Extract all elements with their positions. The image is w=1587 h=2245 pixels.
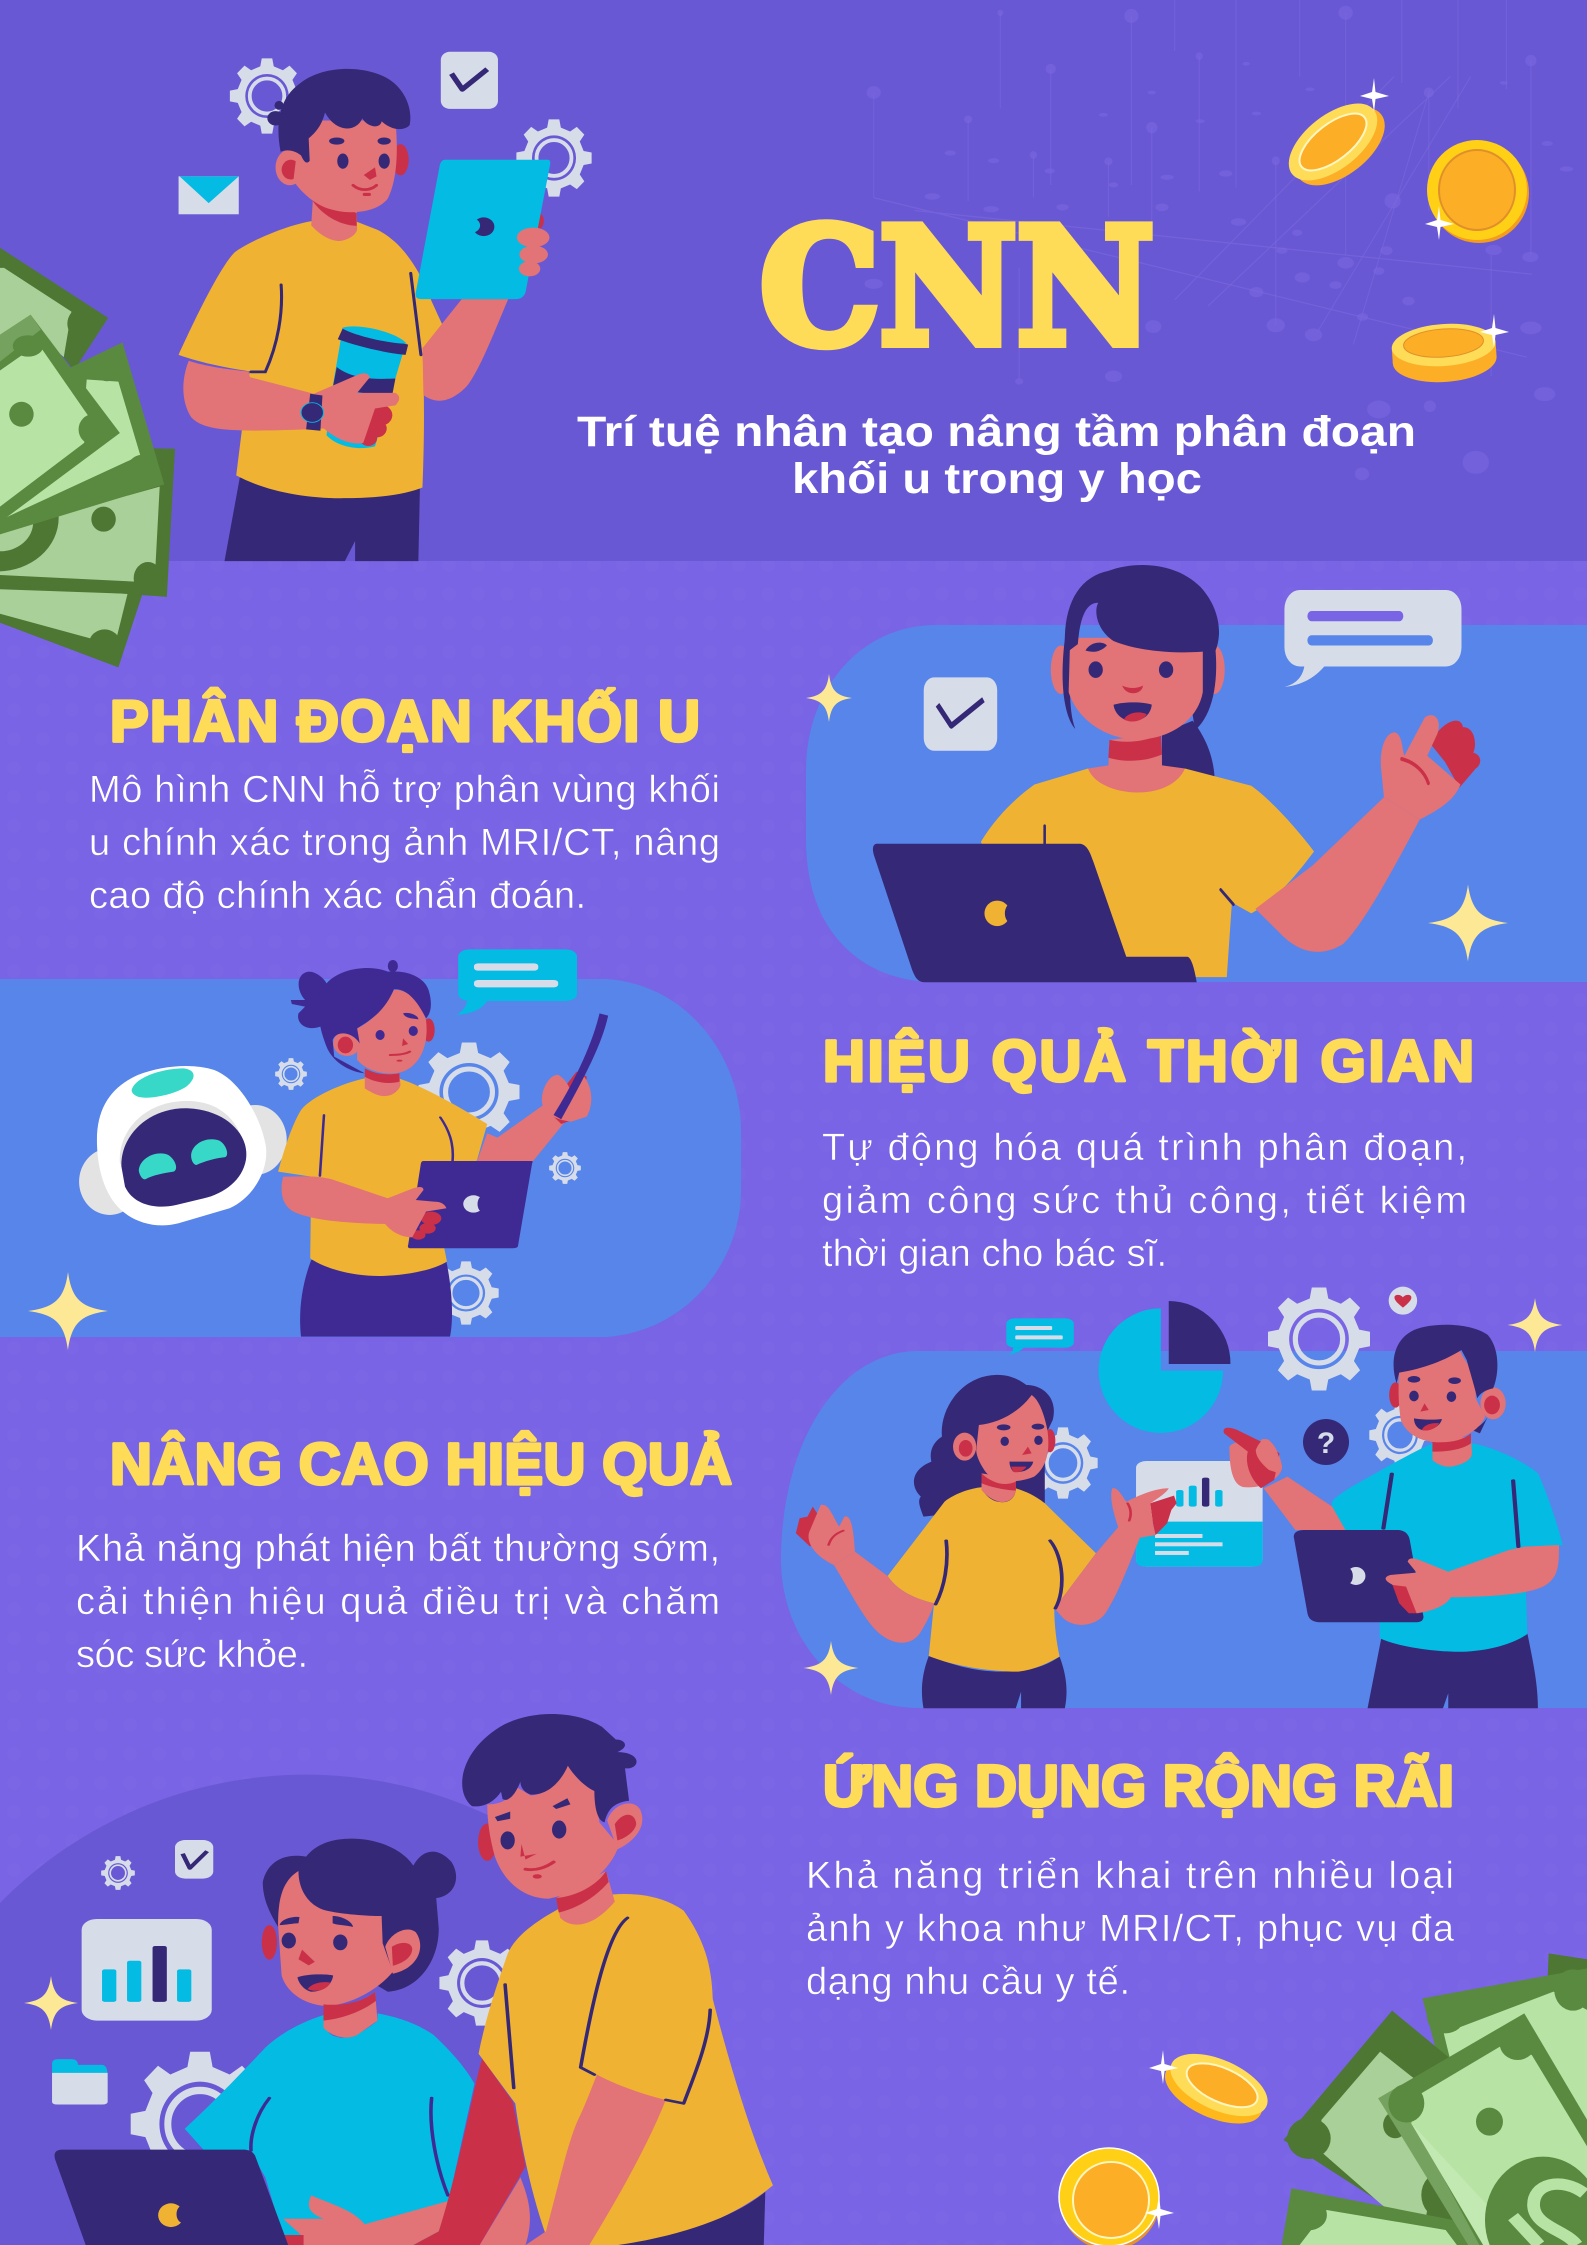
network pattern background — [865, 0, 1573, 480]
text block: phan doan khoi u: Mô hình CNN hỗ trợ phân vùng khối — [89, 768, 720, 811]
gears in bottom scene — [101, 1856, 525, 2196]
text block: nang cao hieu qua: Khả năng phát hiện bất thường sớm, — [76, 1528, 720, 1570]
illustration: money stack top left — [0, 248, 175, 667]
icon: folder — [52, 2059, 108, 2105]
illustration: teacher with tablet — [278, 960, 608, 1337]
chart: bar chart card — [82, 1919, 212, 2021]
text block: phan doan khoi u: u chính xác trong ảnh MRI/CT, nâng — [89, 822, 720, 864]
illustration: man in discussion — [1224, 1325, 1563, 1708]
icon: heart badge — [1389, 1287, 1417, 1315]
panel: dark circle bottom left — [0, 1775, 640, 2245]
text block: nang cao hieu qua — [76, 1528, 720, 1676]
dot pattern background — [0, 561, 1587, 2245]
icon: question mark badge — [1303, 1419, 1349, 1465]
illustration: man with tablet and cup — [179, 69, 550, 561]
text block: ung dung rong rai: dạng nhu cầu y tế. — [806, 1961, 1130, 2003]
subtitle: Trí tuệ nhân tạo nâng tầm phân đoạn — [577, 408, 1416, 456]
icon: checkbox bottom — [175, 1840, 213, 1879]
icon: sparkles in discussion scene — [804, 1298, 1562, 1695]
chart: report card with bars — [1136, 1461, 1263, 1567]
gears behind man with tablet — [230, 58, 592, 197]
text block: hieu qua thoi gian: Tự động hóa quá trình phân đoạn, — [822, 1127, 1467, 1169]
header band — [0, 0, 1587, 561]
illustration: money stack bottom right — [1282, 1953, 1587, 2245]
icon: question mark badge: ? — [1317, 1427, 1335, 1460]
coins bottom — [1059, 2040, 1277, 2245]
heading: hieu qua thoi gian: HIỆU QUẢ THỜI GIAN — [823, 1029, 1474, 1094]
illustration: robot — [79, 1066, 287, 1225]
icon: sparkle left panel — [28, 1272, 108, 1350]
icon: sparkle bottom — [24, 1976, 78, 2030]
icon: cyan chat bubble — [457, 949, 577, 1015]
text block: ung dung rong rai: ảnh y khoa như MRI/CT, phục vụ đa — [806, 1908, 1455, 1950]
subtitle — [577, 408, 1416, 503]
text block: hieu qua thoi gian: thời gian cho bác sĩ. — [822, 1233, 1167, 1275]
illustration: woman at laptop — [55, 1839, 474, 2245]
gears behind teacher — [275, 1042, 581, 1325]
icon: speech bubble — [1284, 590, 1461, 687]
text block: phan doan khoi u — [89, 768, 720, 917]
text block: hieu qua thoi gian — [822, 1127, 1467, 1275]
icon: sparkles on blue panel — [806, 674, 1508, 962]
panel: blue panel right top — [806, 625, 1587, 982]
text block: nang cao hieu qua: cải thiện hiệu quả điều trị và chăm — [76, 1581, 720, 1623]
title: CNN — [760, 193, 1154, 381]
illustration: woman in discussion — [796, 1375, 1177, 1708]
gears in discussion scene — [1028, 1288, 1431, 1499]
illustration: woman with laptop — [873, 565, 1480, 982]
icon: envelope — [179, 176, 239, 214]
panel: blue panel right lower — [781, 1351, 1587, 1708]
chart: pie chart — [1099, 1301, 1230, 1433]
text block: ung dung rong rai — [806, 1855, 1455, 2003]
text block: phan doan khoi u: cao độ chính xác chẩn đoán. — [89, 875, 586, 917]
icon: checkbox on blue panel — [924, 677, 997, 751]
text block: hieu qua thoi gian: giảm công sức thủ công, tiết kiệm — [822, 1180, 1467, 1222]
panel: blue panel left — [0, 979, 741, 1337]
coins top right — [1275, 78, 1529, 386]
heading: ung dung rong rai: ỨNG DỤNG RỘNG RÃI — [823, 1754, 1454, 1819]
subtitle: khối u trong y học — [792, 455, 1202, 503]
icon: checkbox top — [441, 52, 498, 109]
icon: cyan small chat bubble — [1006, 1318, 1074, 1355]
heading: phan doan khoi u: PHÂN ĐOẠN KHỐI U — [110, 689, 700, 754]
text block: nang cao hieu qua: sóc sức khỏe. — [76, 1634, 308, 1676]
illustration: man in yellow shirt — [413, 1714, 773, 2245]
heading: nang cao hieu qua: NÂNG CAO HIỆU QUẢ — [110, 1432, 732, 1497]
text block: ung dung rong rai: Khả năng triển khai trên nhiều loại — [806, 1855, 1454, 1897]
